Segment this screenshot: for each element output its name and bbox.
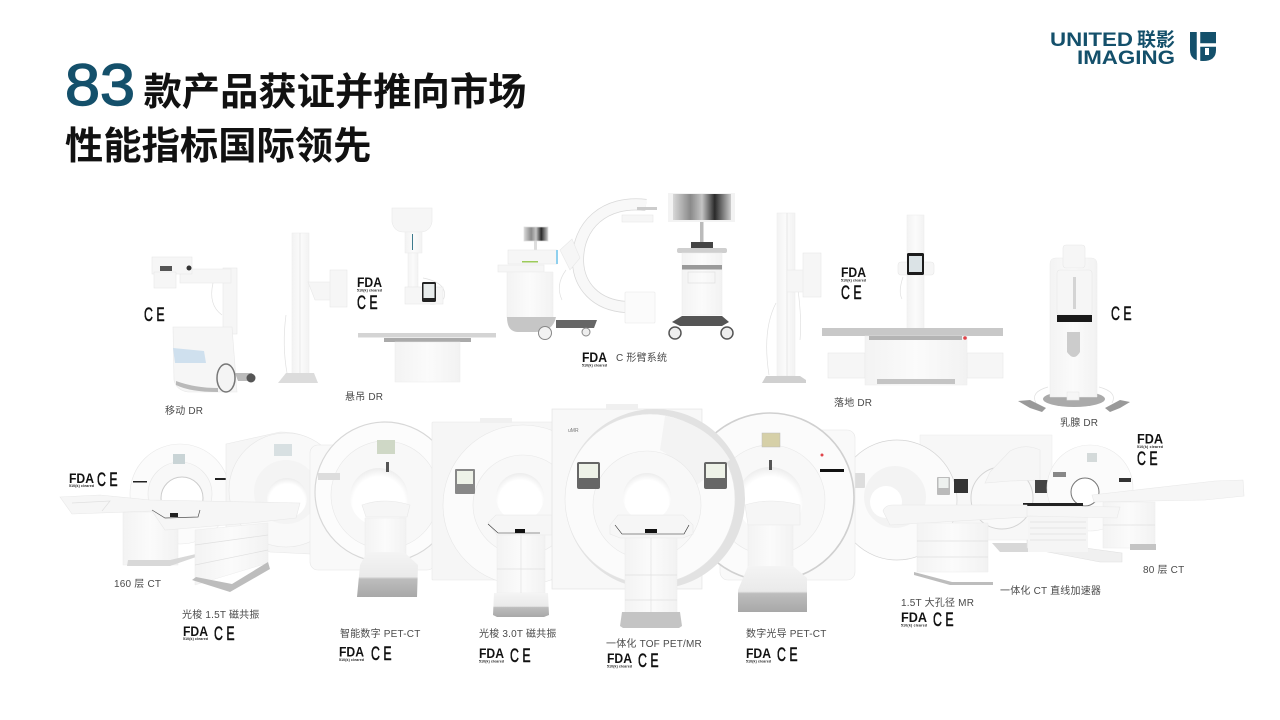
label: 1.5T MR: 光梭 1.5T 磁共振 (182, 608, 260, 621)
certification: digital PET-CT FDA and CE: FDA (746, 645, 771, 661)
certification: ceiling DR FDA and CE: FDA (357, 274, 382, 290)
device: ceiling DR (358, 208, 496, 382)
logo: United Imaging: UNITED (1050, 30, 1133, 51)
device: C-arm workstation (668, 193, 735, 339)
certification: mammography CE: CE (1111, 303, 1132, 325)
certification: 160-slice CT FDA and CE: CE (97, 469, 118, 491)
certification: 80-slice CT FDA and CE: 510(k) cleared (1137, 445, 1163, 449)
label: 160-slice CT: 160 层 CT (114, 578, 161, 590)
certification: smart PET-CT FDA and CE: FDA (339, 644, 364, 660)
certification: 80-slice CT FDA and CE: FDA (1137, 430, 1163, 446)
certification: digital PET-CT FDA and CE: CE (777, 644, 798, 666)
certification: C-arm FDA: FDA (582, 349, 607, 365)
certification: 80-slice CT FDA and CE: CE (1137, 448, 1158, 470)
device: C-arm cart (498, 227, 597, 340)
label: CT linac: 一体化 CT 直线加速器 (1000, 584, 1101, 597)
certification: 1.5T MR FDA and CE (183, 623, 235, 645)
device: digital light-guide PET-CT (686, 413, 855, 612)
certification: TOF PET/MR FDA and CE: CE (638, 650, 659, 672)
certification: floor DR FDA and CE (841, 264, 866, 304)
device: 160-slice CT couch (60, 495, 300, 592)
device: 1.5T wide-bore MR couch (883, 505, 1027, 585)
device: right wall stand (762, 213, 821, 383)
device: mobile DR (152, 257, 256, 392)
label: C-arm system: C 形臂系统 (616, 351, 667, 364)
label: smart digital PET-CT: 智能数字 PET-CT (340, 627, 421, 640)
certification: 160-slice CT FDA and CE: FDA (69, 470, 94, 486)
certification: C-arm FDA: 510(k) cleared (582, 364, 607, 368)
certification: smart PET-CT FDA and CE: 510(k) cleared (339, 658, 364, 662)
device: mammography DR (1018, 245, 1130, 412)
label: 1.5T wide-bore MR: 1.5T 大孔径 MR (901, 596, 974, 609)
certification: 3.0T MR FDA and CE (479, 645, 531, 667)
certification: smart PET-CT FDA and CE (339, 643, 392, 665)
device: TOF PET/MR (552, 404, 745, 628)
certification: wide-bore MR FDA and CE: CE (933, 609, 954, 631)
device: 3.0T MR (432, 418, 603, 617)
certification: floor DR FDA and CE: FDA (841, 264, 866, 280)
device: floor DR (822, 215, 1003, 385)
certification: 3.0T MR FDA and CE: 510(k) cleared (479, 660, 504, 664)
certification: smart PET-CT FDA and CE: CE (371, 643, 392, 665)
certification: 1.5T MR FDA and CE: 510(k) cleared (183, 637, 208, 641)
title: 83 (65, 53, 135, 118)
label: 80-slice CT: 80 层 CT (1143, 564, 1184, 576)
certification: 1.5T MR FDA and CE: FDA (183, 623, 208, 639)
device: 160-slice CT (123, 444, 230, 566)
certification: TOF PET/MR FDA and CE (607, 650, 659, 672)
label: mammography DR: 乳腺 DR (1060, 416, 1098, 429)
title: 性能指标国际领先 (65, 125, 371, 168)
label: floor DR: 落地 DR (834, 396, 872, 409)
device: C-arm arc (560, 204, 657, 323)
certification: mobile DR CE: CE (144, 304, 165, 326)
logo: United Imaging (1050, 29, 1216, 69)
certification: 160-slice CT FDA and CE: 510(k) cleared (69, 484, 94, 488)
title: 款产品获证并推向市场 (144, 71, 526, 114)
certification: digital PET-CT FDA and CE: 510(k) cleared (746, 660, 771, 664)
certification: 80-slice CT FDA and CE (1137, 430, 1163, 470)
device: 80-slice CT (1047, 445, 1244, 550)
device: wall stand (278, 233, 347, 383)
logo: United Imaging: IMAGING (1077, 48, 1175, 69)
certification: floor DR FDA and CE: CE (841, 282, 862, 304)
device: 1.5T wide-bore MR right and linac housing (837, 435, 1052, 560)
certification: 3.0T MR FDA and CE: FDA (479, 645, 504, 661)
logo: United Imaging: 联影 (1137, 29, 1175, 51)
label: digital light-guide PET-CT: 数字光导 PET-CT (746, 627, 827, 640)
title (65, 53, 526, 168)
certification: floor DR FDA and CE: 510(k) cleared (841, 278, 866, 282)
device: 1.5T MR left (226, 432, 343, 555)
certification: TOF PET/MR FDA and CE: 510(k) cleared (607, 664, 632, 668)
certification: ceiling DR FDA and CE: 510(k) cleared (357, 288, 382, 292)
device: linac couch (980, 503, 1122, 562)
certification: ceiling DR FDA and CE: CE (357, 292, 378, 314)
certification: 3.0T MR FDA and CE: CE (510, 645, 531, 667)
label: TOF PET/MR: 一体化 TOF PET/MR (606, 637, 702, 650)
certification: wide-bore MR FDA and CE: FDA (901, 609, 927, 625)
label: 3.0T MR: 光梭 3.0T 磁共振 (479, 627, 557, 640)
certification: ceiling DR FDA and CE (357, 274, 382, 314)
device: smart digital PET-CT (310, 422, 455, 597)
certification: TOF PET/MR FDA and CE: FDA (607, 650, 632, 666)
certification: 1.5T MR FDA and CE: CE (214, 623, 235, 645)
label: mobile DR: 移动 DR (165, 404, 203, 417)
certification: wide-bore MR FDA and CE: 510(k) cleared (901, 624, 927, 628)
device: TOF PET/MR: uMR (568, 428, 579, 434)
certification: 160-slice CT FDA and CE (69, 469, 118, 491)
certification: digital PET-CT FDA and CE (746, 644, 798, 666)
certification: wide-bore MR FDA and CE (901, 609, 954, 631)
label: ceiling DR: 悬吊 DR (345, 391, 383, 403)
